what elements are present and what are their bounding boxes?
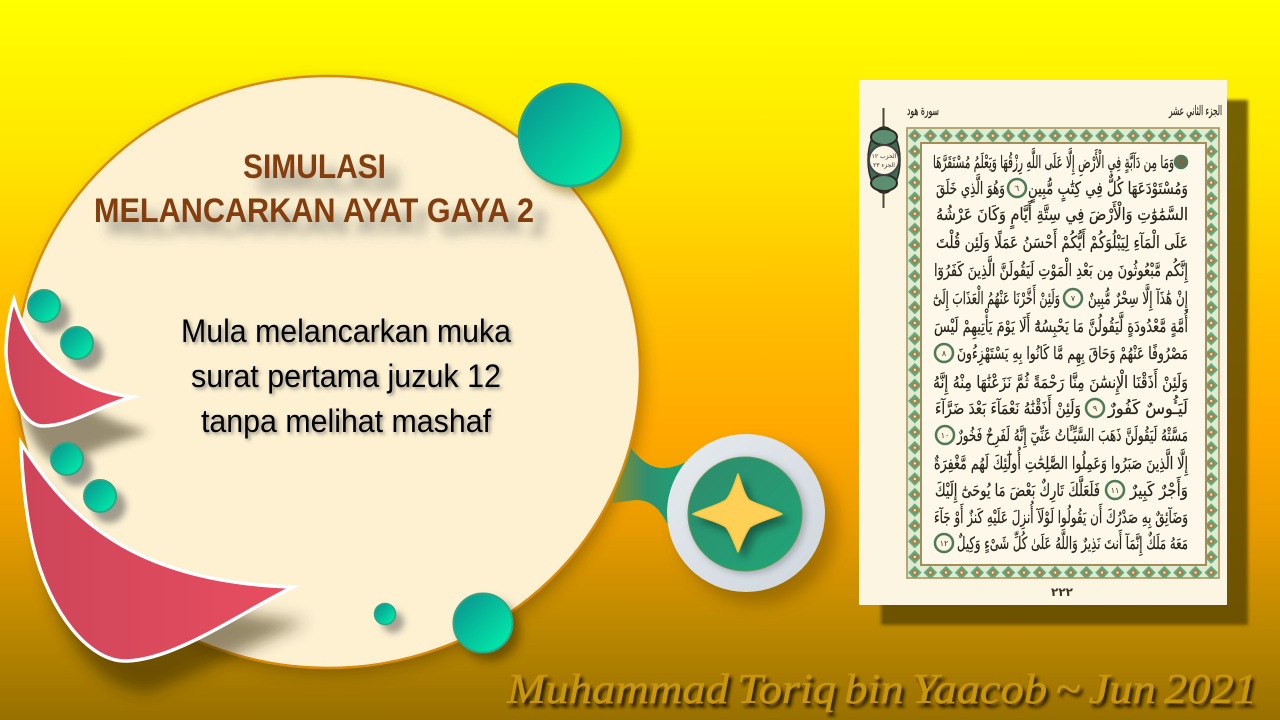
quran text lines: إِنْ هَٰذَآ إِلَّا سِحْرٌ مُّبِينٌ (1088, 283, 1188, 312)
page shadow (881, 100, 1248, 625)
quran text lines: مَصْرُوفًا عَنْهُمْ وَحَاقَ بِهِم مَّا كَانُوا بِهِ يَسْتَهْزِءُونَ (957, 343, 1188, 367)
quran text lines: وَلَئِنْ أَذَقْنَٰهُ نَعْمَآءَ بَعْدَ ضَرَّآءَ (935, 394, 1081, 419)
quran text lines: وَلَئِنْ أَخَّرْنَا عَنْهُمُ الْعَذَابَ إِلَىٰٓ (933, 284, 1060, 312)
red leaf shape: upper (6, 300, 133, 426)
text block: instruction: tanpa melihat mashaf (201, 403, 491, 439)
title: SIMULASI (243, 148, 386, 186)
quran text lines: وَمُسْتَوْدَعَهَا كُلٌّ فِي كِتَٰبٍ مُّبِينٍ (1028, 173, 1188, 204)
quran text lines: فَلَعَلَّكَ تَارِكٌ بَعْضَ مَا يُوحَىٰٓ إِلَيْكَ (935, 475, 1100, 504)
text block: instruction: Mula melancarkan muka (181, 313, 511, 349)
quran text lines: إِنَّكُم مَّبْعُوثُونَ مِن بَعْدِ الْمَوْتِ لَيَقُولَنَّ الَّذِينَ كَفَرُوٓا (934, 255, 1188, 284)
ayah markers: ٩ (1093, 404, 1097, 413)
ornamental frame (907, 128, 1219, 578)
main circle shadow (20, 82, 644, 674)
text block: instruction (181, 313, 511, 439)
icon: teal dots group (28, 290, 404, 633)
red leaf shape: lower (21, 443, 293, 661)
quran text lines: عَلَى الْمَآءِ لِيَبْلُوَكُمْ أَيُّكُمْ أَحْسَنُ عَمَلًا وَلَئِن قُلْتَ (936, 228, 1188, 253)
page header: surah: سورة هود (907, 104, 939, 119)
ayah markers: ١٠ (941, 431, 949, 440)
quran text lines: السَّمَٰوَٰتِ وَالْأَرْضَ فِي سِتَّةِ أَيَّامٍ وَكَانَ عَرْشُهُ (936, 200, 1188, 230)
quran text lines: وَلَئِنْ أَذَقْنَا الْإِنسَٰنَ مِنَّا رَحْمَةً ثُمَّ نَزَعْنَٰهَا مِنْهُ إِنَّهُ (933, 368, 1188, 396)
connector between main circle and badge (612, 440, 690, 540)
icon: bottom teal circle (454, 594, 520, 661)
signature: Muhammad Toriq bin Yaacob ~ Jun 2021 (506, 667, 1257, 713)
ayah markers: ٨ (942, 349, 947, 358)
page number: ٢٢٢ (1051, 585, 1074, 599)
ayah markers: ٧ (1071, 294, 1076, 303)
quran text lines: وَأَجْرٌ كَبِيرٌ (1129, 476, 1188, 502)
icon: juz medallion: الجزء ٢٣ (873, 162, 895, 169)
quran text lines: وَهُوَ الَّذِي خَلَقَ (936, 173, 1005, 199)
ayah markers: ٦ (1015, 184, 1019, 193)
text block: instruction: surat pertama juzuk 12 (191, 358, 501, 394)
red leaf shape: lower shadow (40, 480, 308, 692)
icon: star badge (667, 434, 837, 604)
page header: juz: الجزء الثاني عشر (1168, 104, 1222, 119)
ayah markers: ١١ (1111, 486, 1119, 495)
quran text lines: لَيَـُٔوسٌ كَفُورٌ (1107, 395, 1188, 419)
ayah markers (935, 156, 1187, 552)
quran text lines: مَسَّتْهُ لَيَقُولَنَّ ذَهَبَ السَّيِّـَٔاتُ عَنِّيٓ إِنَّهُ لَفَرِحٌ فَخُورٌ (956, 424, 1188, 449)
icon: top right teal circle (519, 84, 630, 195)
quran text lines (933, 147, 1188, 557)
icon: four point star (693, 474, 782, 552)
icon: juz medallion (868, 108, 900, 208)
panel: mushaf page (859, 80, 1227, 605)
title (94, 148, 534, 230)
icon: juz medallion: الحزب ١٢ (872, 153, 897, 160)
panel: main cream circle (16, 76, 640, 668)
quran text lines: أُمَّةٍ مَّعْدُودَةٍ لَّيَقُولُنَّ مَا يَحْبِسُهُٓ أَلَا يَوْمَ يَأْتِيهِمْ لَيْسَ (934, 309, 1188, 340)
quran text lines: إِلَّا الَّذِينَ صَبَرُوا وَعَمِلُوا الصَّٰلِحَٰتِ أُولَٰٓئِكَ لَهُم مَّغْفِرَةٌ (934, 447, 1188, 477)
ayah markers: ١٢ (940, 539, 948, 548)
title: MELANCARKAN AYAT GAYA 2 (94, 192, 534, 230)
red leaf shape: upper shadow (19, 335, 150, 463)
